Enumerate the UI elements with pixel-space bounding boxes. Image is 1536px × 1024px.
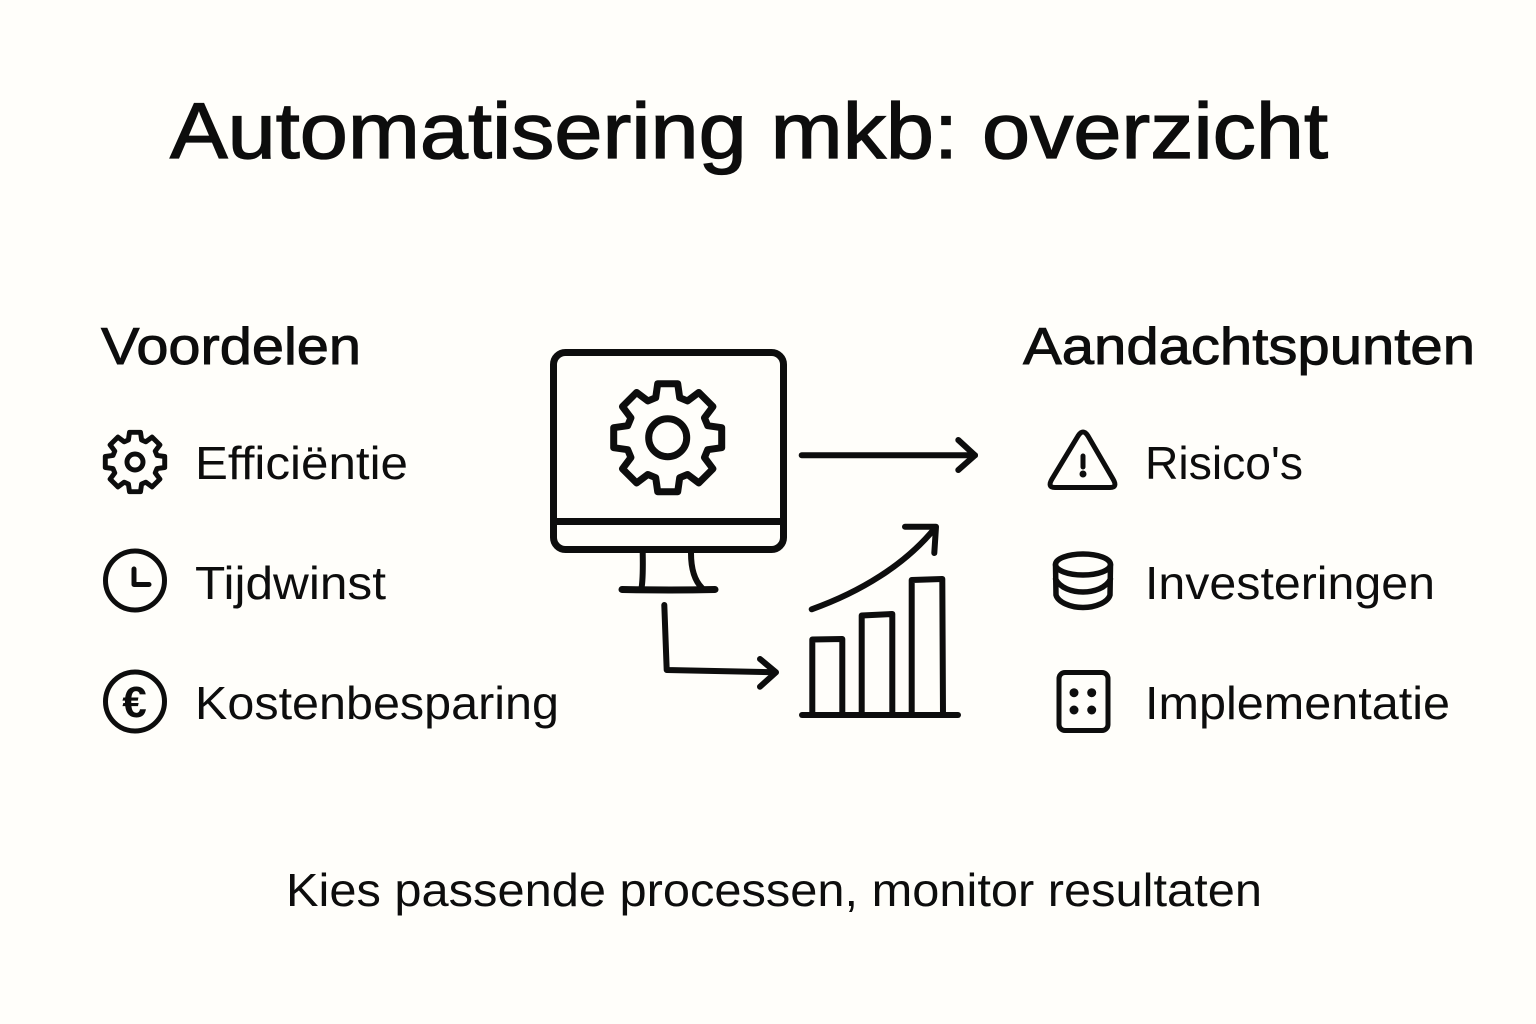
bar chart with trend arrow — [802, 527, 958, 715]
item: efficiëntie: Efficiëntie — [195, 437, 408, 489]
panel: aandachtspunten — [1023, 318, 1475, 730]
icon: clock — [106, 551, 164, 610]
heading: voordelen: Voordelen — [101, 318, 361, 376]
item: risico's: Risico's — [1145, 437, 1303, 489]
panel: voordelen — [101, 318, 559, 731]
icon: coin stack — [1056, 554, 1110, 608]
arrow: monitor to aandachtspunten — [802, 440, 975, 470]
item: kostenbesparing: Kostenbesparing — [195, 677, 559, 729]
item: implementatie: Implementatie — [1145, 677, 1450, 729]
item: tijdwinst: Tijdwinst — [195, 557, 386, 609]
icon: gear — [105, 432, 165, 492]
icon: warning triangle — [1050, 432, 1115, 488]
heading: aandachtspunten: Aandachtspunten — [1023, 318, 1475, 376]
icon: dice — [1059, 672, 1108, 730]
title: Automatisering mkb: overzicht — [170, 86, 1328, 175]
arrow: monitor to chart — [664, 605, 776, 687]
footer text: Kies passende processen, monitor resultaten — [286, 864, 1262, 916]
icon: monitor with gear — [554, 352, 784, 590]
icon: euro: € — [122, 678, 147, 727]
item: investeringen: Investeringen — [1145, 557, 1435, 609]
icon: euro — [106, 672, 164, 731]
